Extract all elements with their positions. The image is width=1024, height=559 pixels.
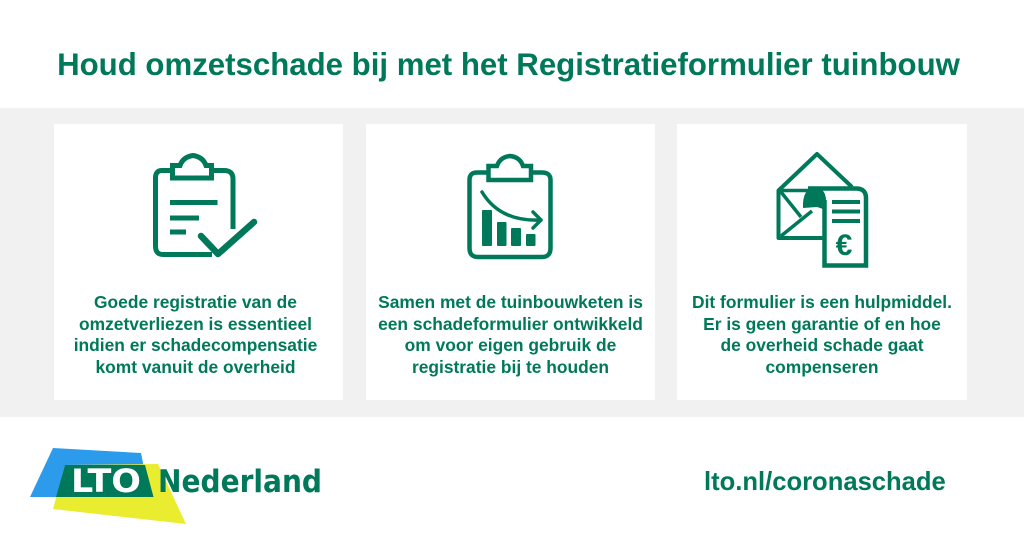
text: schadeformulier: [378, 292, 643, 377]
text: schadeformulier: registratie bij te houden: [412, 357, 609, 377]
icon: envelope with euro invoice: [778, 154, 866, 266]
icon: clipboard with declining chart: [470, 156, 550, 257]
text: registratie: omzetverliezen is essentieel: [79, 314, 312, 334]
text: schadeformulier: Samen met de tuinbouwketen is: [378, 292, 643, 312]
text: registratie: komt vanuit de overheid: [95, 357, 296, 377]
text: hulpmiddel: Er is geen garantie of en hoe: [703, 314, 941, 334]
panel: registratie: [54, 124, 343, 400]
link text: lto.nl/coronaschade: [704, 468, 946, 496]
logo: LTO Nederland: Nederland: [158, 464, 322, 500]
title: Houd omzetschade bij met het Registratieformulier tuinbouw: [57, 47, 960, 82]
text: hulpmiddel: compenseren: [765, 357, 879, 377]
text: registratie: [74, 292, 317, 377]
logo: LTO Nederland: LTO: [71, 462, 141, 500]
panel: hulpmiddel: [677, 124, 967, 400]
text: hulpmiddel: [692, 292, 952, 377]
icon: clipboard with check: [156, 156, 254, 254]
text: schadeformulier: om voor eigen gebruik de: [405, 335, 616, 355]
grey panel band: [0, 108, 1024, 417]
text: registratie: Goede registratie van de: [94, 292, 297, 312]
text: hulpmiddel: de overheid schade gaat: [721, 335, 923, 355]
text: registratie: indien er schadecompensatie: [74, 335, 317, 355]
text: hulpmiddel: Dit formulier is een hulpmiddel.: [692, 292, 952, 312]
text: schadeformulier: een schadeformulier ontwikkeld: [378, 314, 643, 334]
panel: schadeformulier: [366, 124, 655, 400]
icon: envelope with euro invoice: €: [836, 229, 853, 262]
